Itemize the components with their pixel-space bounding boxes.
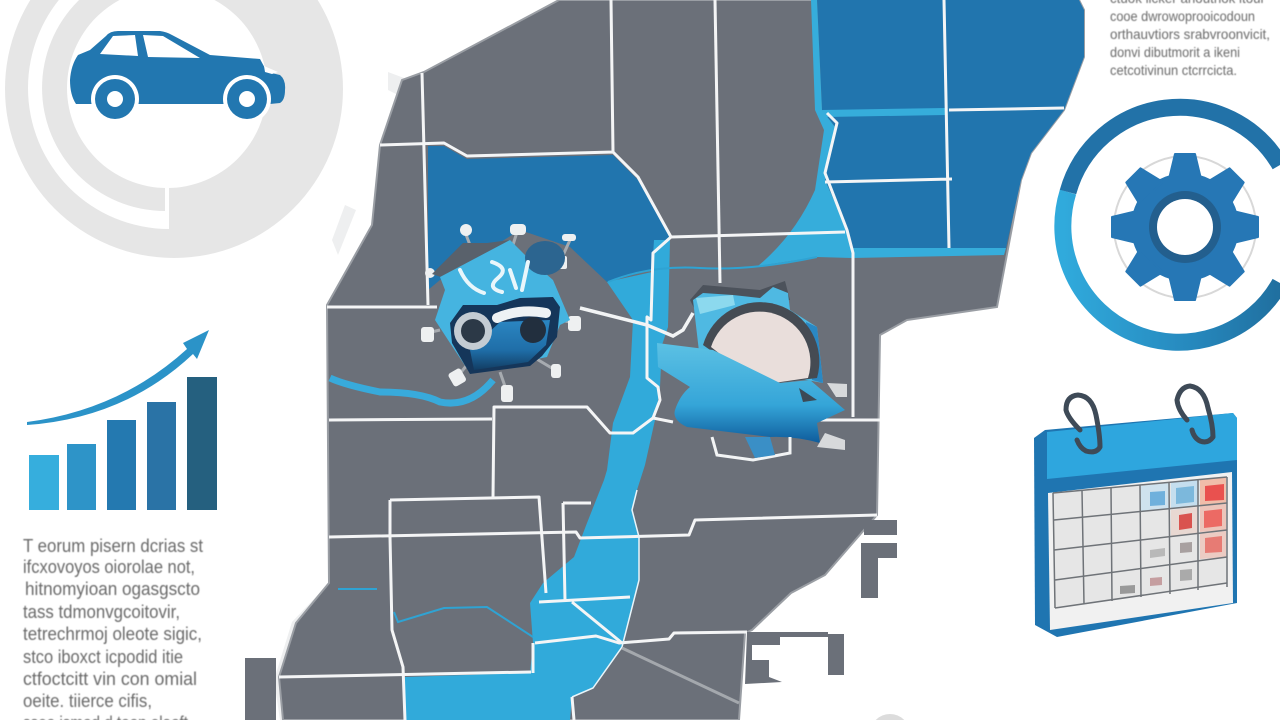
virus right eye [520, 317, 546, 343]
map: dark blue central district [428, 146, 671, 290]
virus scribble [460, 262, 528, 293]
gear dial outline [703, 302, 819, 385]
text block: lower left: oeite. tiierce cifis, [23, 691, 152, 711]
text block: top right: orthauvtiors srabvroonvicit, [1110, 26, 1270, 42]
virus left eye [454, 312, 492, 350]
map: light band across north-east [822, 108, 945, 117]
decorative grey circle at bottom edge [870, 714, 910, 720]
calendar header [1047, 413, 1237, 479]
bar 3 [107, 420, 136, 510]
virus goggles frame [450, 297, 560, 374]
gear shadow [690, 281, 790, 310]
gear dial face [711, 312, 810, 385]
virus body [435, 240, 570, 373]
map: light blue north-east band [758, 0, 1006, 266]
map: dark blue north-east districts [817, 0, 1084, 248]
text block: lower left: T eorum pisern dcrias st [23, 536, 203, 556]
rising arrow [27, 330, 209, 425]
virus white band [497, 311, 546, 318]
gear teeth and hub [1112, 154, 1258, 300]
ring upper part [1068, 107, 1280, 192]
bar 4 [147, 402, 176, 510]
calendar grid [1053, 477, 1227, 608]
map: thin white river edge [572, 490, 639, 697]
bar 1 [29, 455, 59, 510]
text block: top right: cooe dwrowoprooicodoun [1110, 8, 1255, 24]
text block: lower left: ctfoctcitt vin con omial [23, 669, 197, 689]
gear highlight [696, 295, 735, 314]
map: light blue river [405, 240, 670, 720]
gear grey fragments [817, 383, 847, 450]
virus feet [421, 224, 581, 402]
icon: calendar [1034, 386, 1237, 637]
text block: lower left: hitnomyioan ogasgscto [25, 579, 200, 599]
icon: damaged gear marker [580, 281, 847, 460]
bar chart with rising arrow [27, 330, 217, 510]
map: tributary stream [330, 378, 493, 403]
map: thin streams [338, 257, 817, 637]
thin grey gear halo [1114, 156, 1256, 298]
virus dark patch [525, 241, 565, 275]
text block: lower left: ifcxovoyos oiorolae not, [23, 557, 195, 577]
text block: lower left: tetrechrmoj oleote sigic, [23, 624, 202, 644]
calendar coloured cells [1120, 477, 1226, 594]
icon: car in grey rings [5, 0, 343, 258]
map: detached grey blocks [245, 520, 897, 720]
ring lower part [1063, 192, 1280, 342]
text block: lower left: tass tdmonvgcoitovir, [23, 602, 180, 622]
calendar blank cell shading [1053, 477, 1227, 608]
text block: top right: donvi dibutmorit a ikeni [1110, 44, 1240, 60]
icon: virus-like blue marker [421, 224, 581, 402]
icon: gear in ring [1063, 107, 1280, 342]
text block: lower left [23, 536, 203, 720]
gear upper body [693, 287, 823, 383]
gear lower blue body [657, 343, 845, 443]
calendar page [1048, 472, 1233, 630]
calendar body [1034, 413, 1237, 637]
map: white district boundaries [279, 0, 1064, 720]
map of districts [245, 0, 1084, 720]
virus lower body [470, 320, 550, 370]
lower white bracket [712, 437, 790, 460]
gear dark side [806, 322, 823, 383]
bar 5 [187, 377, 217, 510]
map: grey base [279, 0, 1084, 720]
virus crown shadow [432, 240, 520, 280]
text block: top right: cetcotivinun ctcrrcicta. [1110, 62, 1237, 78]
map: grey diagonal boundary [622, 648, 739, 703]
virus legs [427, 232, 575, 392]
calendar binder clips [1066, 386, 1213, 452]
text block: top right [1110, 0, 1270, 78]
bracket inner fragment [745, 437, 775, 458]
text block: lower left: stco iboxct icpodid itie [23, 647, 183, 667]
map: soft outline shadows [274, 72, 404, 720]
bar 2 [67, 444, 96, 510]
gear small dark notch [799, 388, 817, 402]
pointer line [580, 308, 693, 336]
